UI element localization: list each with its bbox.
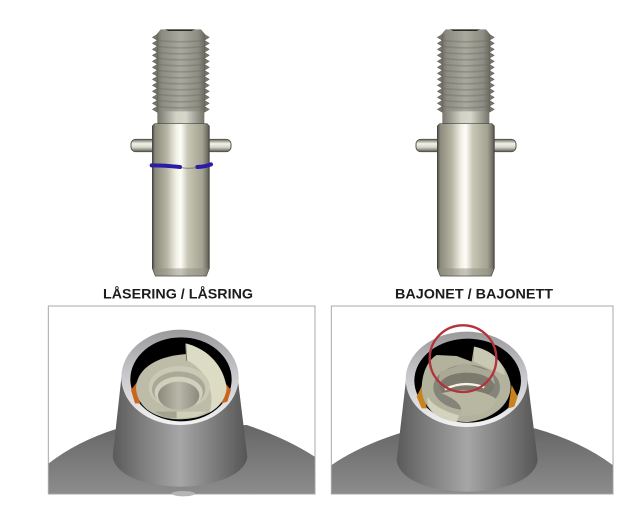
orange seal	[417, 385, 518, 408]
opening	[130, 337, 232, 421]
base plate	[49, 425, 315, 494]
blue locking ring	[152, 164, 211, 168]
red highlight circle	[430, 325, 496, 392]
bolt: bayonet version	[416, 29, 516, 276]
panel: bayonet socket	[331, 306, 613, 494]
cone	[113, 375, 247, 487]
base plate	[332, 428, 613, 494]
insert	[136, 343, 227, 419]
panel: locking ring socket	[48, 306, 315, 496]
heading: bayonet: BAJONET / BAJONETT	[395, 286, 553, 302]
rim	[406, 332, 528, 427]
orange seal	[131, 382, 231, 403]
bayonet insert	[422, 347, 511, 422]
small bump	[172, 491, 195, 496]
rim	[121, 330, 239, 425]
cone	[397, 380, 538, 492]
bolt: locking ring version	[131, 29, 231, 276]
heading: locking ring: LÅSERING / LÅSRING	[103, 286, 253, 302]
opening	[414, 339, 521, 423]
